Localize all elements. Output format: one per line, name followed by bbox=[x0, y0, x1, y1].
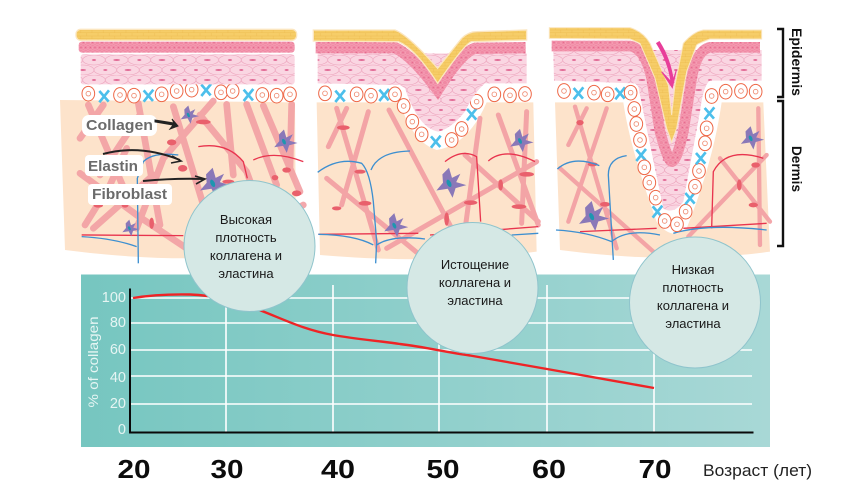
x axis age labels: 60 bbox=[532, 454, 566, 484]
x axis age labels: 20 bbox=[118, 454, 150, 484]
callout: Elastin label: Elastin bbox=[88, 158, 138, 175]
epidermis spinous layer bbox=[81, 54, 295, 84]
callout: Elastin label bbox=[85, 150, 181, 176]
blood vessels bbox=[556, 155, 767, 260]
collagen knots bbox=[94, 120, 301, 229]
epidermis pink strip bbox=[552, 46, 760, 162]
blood vessels bbox=[318, 151, 538, 263]
basal cell row bbox=[82, 82, 296, 103]
arrow: pink fold arrow bbox=[657, 42, 676, 88]
panel: thinning skin bbox=[313, 30, 538, 263]
axes bbox=[130, 288, 754, 432]
y axis labels: 60 bbox=[110, 342, 126, 358]
x axis title: Возраст (лет) bbox=[703, 461, 812, 480]
callout: low density: коллагена и bbox=[657, 298, 729, 313]
callout: depletion: эластина bbox=[447, 293, 503, 308]
collagen knots bbox=[576, 120, 760, 207]
fibroblasts bbox=[384, 129, 534, 237]
panel: young skin bbox=[60, 29, 303, 263]
y axis labels: 0 bbox=[118, 422, 126, 438]
collagen fibers bbox=[560, 107, 770, 252]
callout: depletion: коллагена и bbox=[439, 275, 511, 290]
callout: depletion bbox=[407, 222, 538, 354]
callout: high density: Высокая bbox=[220, 212, 272, 227]
epidermis pink strip bbox=[316, 48, 526, 90]
x axis age labels: 70 bbox=[638, 454, 672, 484]
x axis age labels: 40 bbox=[321, 454, 355, 484]
callout: Fibroblast label: Fibroblast bbox=[92, 186, 167, 203]
bracket: Dermis: Dermis bbox=[789, 146, 804, 192]
collagen fibers bbox=[80, 101, 303, 248]
callout: Collagen label bbox=[82, 115, 178, 136]
grid lines bbox=[130, 285, 752, 432]
y axis labels: 100 bbox=[102, 290, 126, 306]
panel: wrinkled skin bbox=[549, 28, 770, 260]
collagen knots bbox=[332, 125, 534, 226]
fibroblasts bbox=[579, 126, 764, 231]
epidermis spinous layer bbox=[318, 53, 527, 132]
callout: Collagen label: Collagen bbox=[86, 117, 153, 134]
x axis age labels bbox=[118, 454, 672, 484]
epidermis spinous layer bbox=[553, 50, 762, 211]
blood vessels bbox=[82, 146, 303, 263]
y axis labels: 40 bbox=[110, 370, 126, 386]
callout: high density: эластина bbox=[218, 266, 274, 281]
dermis layer bbox=[60, 100, 296, 258]
y axis labels: 80 bbox=[110, 315, 126, 331]
fibroblasts bbox=[122, 105, 298, 236]
callout: low density: эластина bbox=[665, 316, 721, 331]
callout: high density bbox=[184, 180, 315, 312]
dermis layer bbox=[317, 102, 537, 259]
dermis layer bbox=[555, 102, 770, 258]
callout: low density: Низкая bbox=[672, 262, 714, 277]
y axis title: % of collagen bbox=[86, 317, 101, 407]
chart: percent of collagen by age bbox=[81, 274, 770, 447]
chart background bbox=[81, 274, 770, 447]
x axis age labels: 30 bbox=[210, 454, 244, 484]
stratum corneum bbox=[549, 28, 762, 142]
collagen fibers bbox=[327, 108, 538, 252]
bracket: Epidermis: Epidermis bbox=[789, 28, 804, 96]
callout: high density: плотность bbox=[215, 230, 277, 245]
bracket: Dermis bbox=[777, 101, 804, 246]
basal cell row bbox=[319, 86, 531, 148]
callout: Fibroblast label bbox=[88, 176, 205, 205]
y axis labels: 20 bbox=[110, 396, 126, 412]
basal cell row bbox=[558, 84, 762, 232]
stratum corneum bbox=[313, 30, 527, 83]
callout: depletion: Истощение bbox=[441, 257, 509, 272]
collagen curve bbox=[133, 294, 654, 388]
x axis age labels: 50 bbox=[426, 454, 460, 484]
callout: low density: плотность bbox=[662, 280, 724, 295]
bracket: Epidermis bbox=[777, 28, 804, 97]
callout: low density bbox=[630, 237, 760, 368]
y axis labels bbox=[102, 290, 126, 438]
stratum corneum bbox=[76, 29, 297, 40]
callout: high density: коллагена и bbox=[210, 248, 282, 263]
epidermis pink strip bbox=[79, 42, 295, 53]
